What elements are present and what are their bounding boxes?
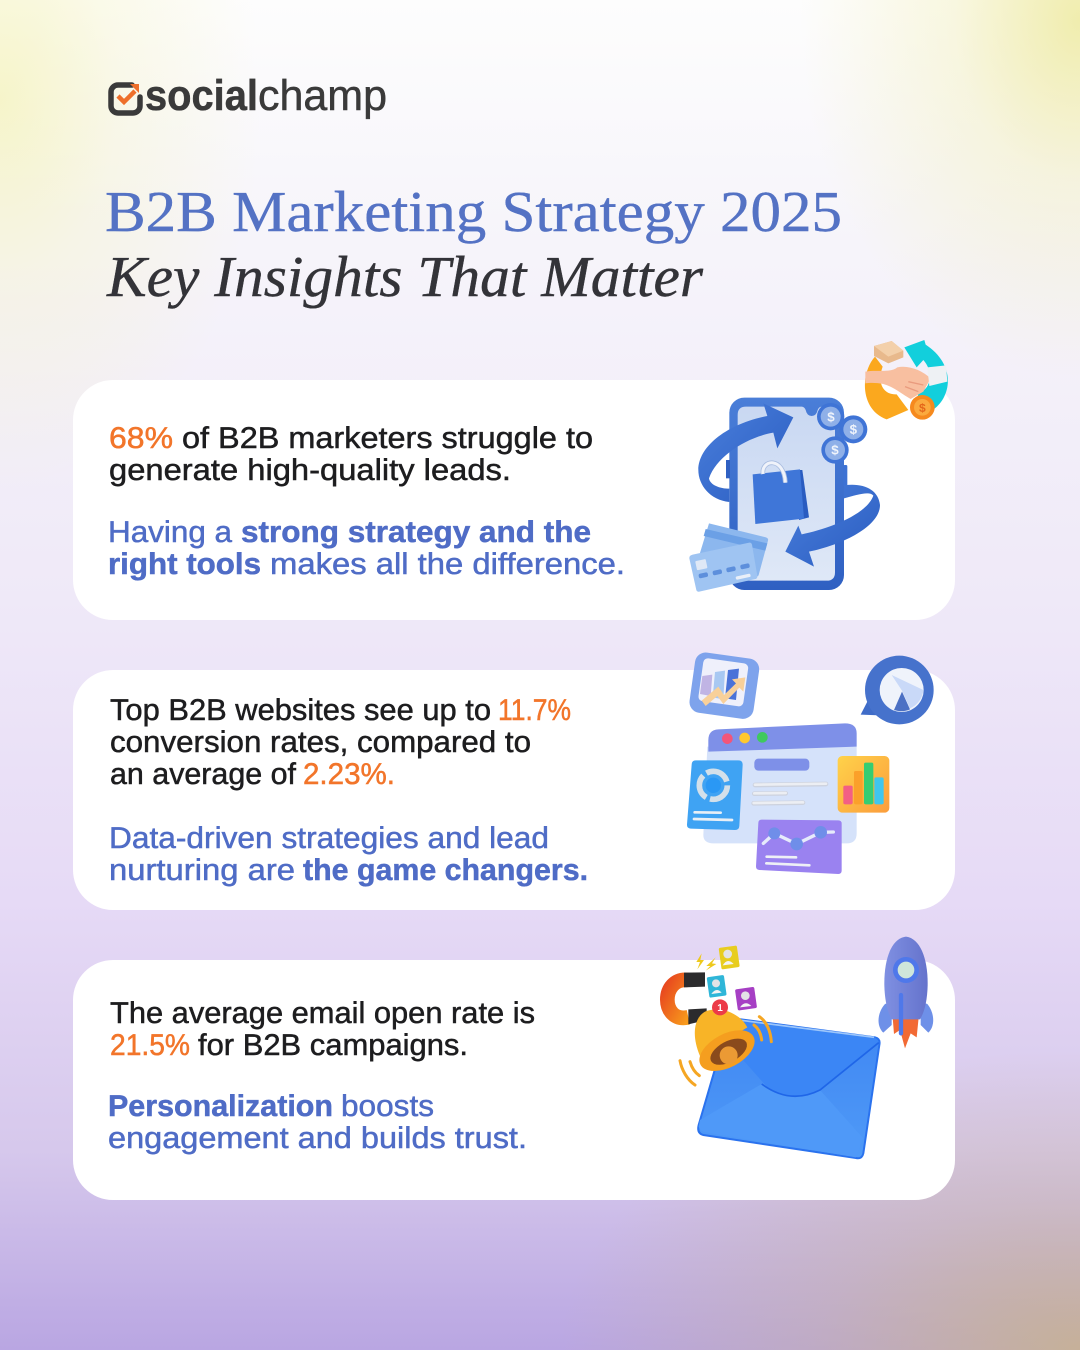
icon: pie chart bubble — [861, 656, 934, 724]
insight text: personalization: boosts — [341, 1090, 434, 1123]
logo: socialchamp — [111, 72, 387, 120]
illustration: email with bell and rocket — [667, 937, 933, 1158]
insight text: strategy — [108, 516, 625, 581]
panel: conversion card — [73, 651, 955, 910]
card: donut tile — [687, 760, 743, 830]
rotating arrows — [698, 403, 880, 567]
people tiles — [696, 945, 757, 1011]
phone — [726, 398, 847, 590]
stat text: conversion rates: Top B2B websites see up to — [110, 694, 491, 727]
credit cards — [689, 523, 768, 592]
stat text: leads — [109, 422, 593, 487]
card: line chart tile — [756, 820, 842, 874]
stat text: conversion rates — [110, 694, 571, 791]
rocket — [879, 937, 933, 1048]
magnet — [667, 972, 707, 1024]
coins: $ — [831, 443, 839, 458]
insight text: strategy: Having a — [108, 516, 232, 549]
stat text: email open rate: 21.5% — [110, 1029, 190, 1062]
card background — [73, 380, 955, 620]
insight text: strategy: strong strategy and the — [241, 516, 591, 549]
illustration: phone with arrows — [689, 340, 948, 592]
icon: handshake cycle: $ — [919, 401, 926, 415]
coins: $ — [850, 422, 857, 437]
shopping bag — [753, 463, 809, 524]
stat text: conversion rates: an average of — [110, 758, 297, 791]
panel: leads card — [73, 340, 955, 620]
stat text: conversion rates: 11.7% — [498, 694, 571, 727]
stat text: conversion rates: 2.23%. — [303, 758, 395, 791]
notification bell — [693, 999, 761, 1079]
insight text: strategy: right tools — [108, 548, 261, 581]
sound waves — [680, 1017, 771, 1085]
insight text: data-driven: the game changers. — [303, 854, 588, 887]
envelope — [698, 1018, 880, 1158]
stat text: email open rate: The average email open rate is — [110, 997, 535, 1030]
icon: growth tile — [688, 651, 761, 720]
stat text: leads: 68% — [109, 422, 173, 455]
notification bell: 1 — [717, 1002, 723, 1013]
card: bar chart tile — [838, 756, 889, 813]
logo wordmark: champ — [258, 72, 387, 120]
stat text: email open rate: for B2B campaigns. — [198, 1029, 468, 1062]
insight text: data-driven — [109, 822, 588, 887]
coins: $ — [827, 410, 835, 424]
title — [105, 179, 842, 309]
panel: email card — [73, 937, 955, 1200]
coins — [817, 403, 867, 464]
insight text: personalization: engagement and builds trust. — [108, 1122, 527, 1155]
browser window — [703, 723, 857, 843]
stat text: leads: of B2B marketers struggle to — [182, 422, 593, 455]
card background — [73, 670, 955, 910]
stat text: leads: generate high-quality leads. — [109, 454, 511, 487]
insight text: strategy: makes all the difference. — [270, 548, 625, 581]
icon: logo check box — [111, 84, 140, 113]
insight text: personalization — [108, 1090, 527, 1155]
card background — [73, 960, 955, 1200]
icon: handshake cycle — [865, 340, 948, 420]
heading line 1: B2B Marketing Strategy 2025 — [105, 179, 842, 244]
heading line 2: Key Insights That Matter — [106, 244, 703, 309]
insight text: data-driven: nurturing are — [109, 854, 295, 887]
stat text: conversion rates: conversion rates, compared to — [110, 726, 531, 759]
illustration: analytics dashboard — [687, 651, 934, 874]
insight text: data-driven: Data-driven strategies and lead — [109, 822, 549, 855]
logo wordmark: social — [145, 72, 258, 120]
insight text: personalization: Personalization — [108, 1090, 333, 1123]
stat text: email open rate — [110, 997, 535, 1062]
